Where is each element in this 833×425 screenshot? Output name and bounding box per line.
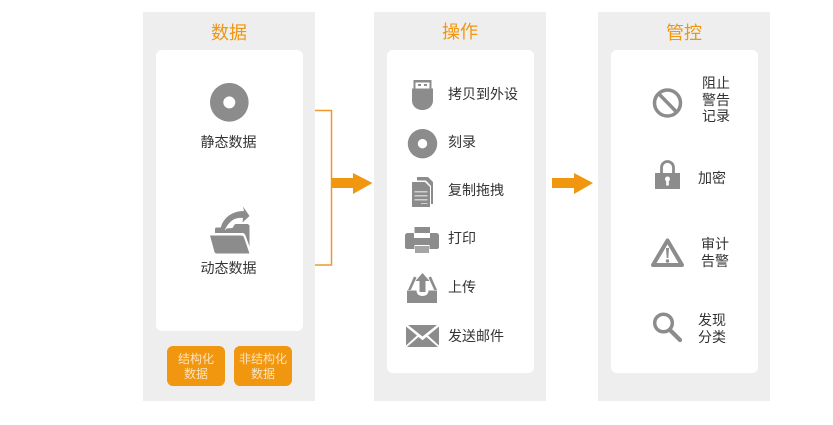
label: discover and classify (698, 312, 726, 345)
icon: padlock (655, 162, 680, 189)
label: block, alert, record: 阻止 (702, 75, 730, 91)
label: discover and classify: 发现 (698, 312, 726, 328)
label: audit alert (701, 236, 729, 269)
icon: static data disc (210, 83, 249, 122)
label: block, alert, record: 记录 (702, 108, 730, 124)
icon: dynamic data folder (210, 206, 250, 254)
label: print: 打印 (448, 230, 476, 246)
icon: magnifier (655, 314, 680, 340)
label: send email: 发送邮件 (448, 328, 504, 344)
button: unstructured data: 非结构化 (239, 351, 287, 366)
icon: block sign (654, 90, 680, 116)
panel: data (143, 12, 315, 401)
heading: data: 数据 (211, 23, 247, 43)
label: audit alert: 告警 (701, 253, 729, 269)
icon: burn disc (408, 129, 437, 158)
label: encryption: 加密 (698, 170, 726, 186)
button: unstructured data (234, 346, 292, 386)
panel: control (598, 12, 770, 401)
button: structured data: 数据 (184, 366, 208, 381)
panel: operations (374, 12, 546, 401)
label: block, alert, record (702, 75, 730, 124)
label: copy to device: 拷贝到外设 (448, 86, 518, 102)
label: audit alert: 审计 (701, 236, 729, 252)
icon: upload tray (407, 273, 437, 303)
button: structured data: 结构化 (178, 351, 214, 366)
operations card (387, 50, 534, 373)
icon: copy documents (412, 177, 433, 207)
icon: printer (405, 227, 439, 253)
button: structured data (167, 346, 225, 386)
label: copy and drag: 复制拖拽 (448, 182, 504, 198)
arrow: data to operations (332, 173, 372, 194)
icon: USB drive (412, 80, 433, 110)
heading: operations: 操作 (442, 22, 478, 42)
icon: envelope (406, 325, 439, 347)
label: burn: 刻录 (448, 134, 476, 150)
label: static data: 静态数据 (200, 134, 256, 150)
label: dynamic data: 动态数据 (200, 260, 256, 276)
arrow: operations to control (552, 173, 593, 194)
bracket connector (315, 110, 332, 265)
heading: control: 管控 (666, 23, 702, 43)
label: upload: 上传 (448, 279, 476, 295)
button: unstructured data: 数据 (251, 366, 275, 381)
label: discover and classify: 分类 (698, 329, 726, 345)
control card (611, 50, 758, 373)
data card (156, 50, 303, 331)
icon: warning triangle (653, 240, 682, 265)
label: block, alert, record: 警告 (702, 92, 730, 108)
